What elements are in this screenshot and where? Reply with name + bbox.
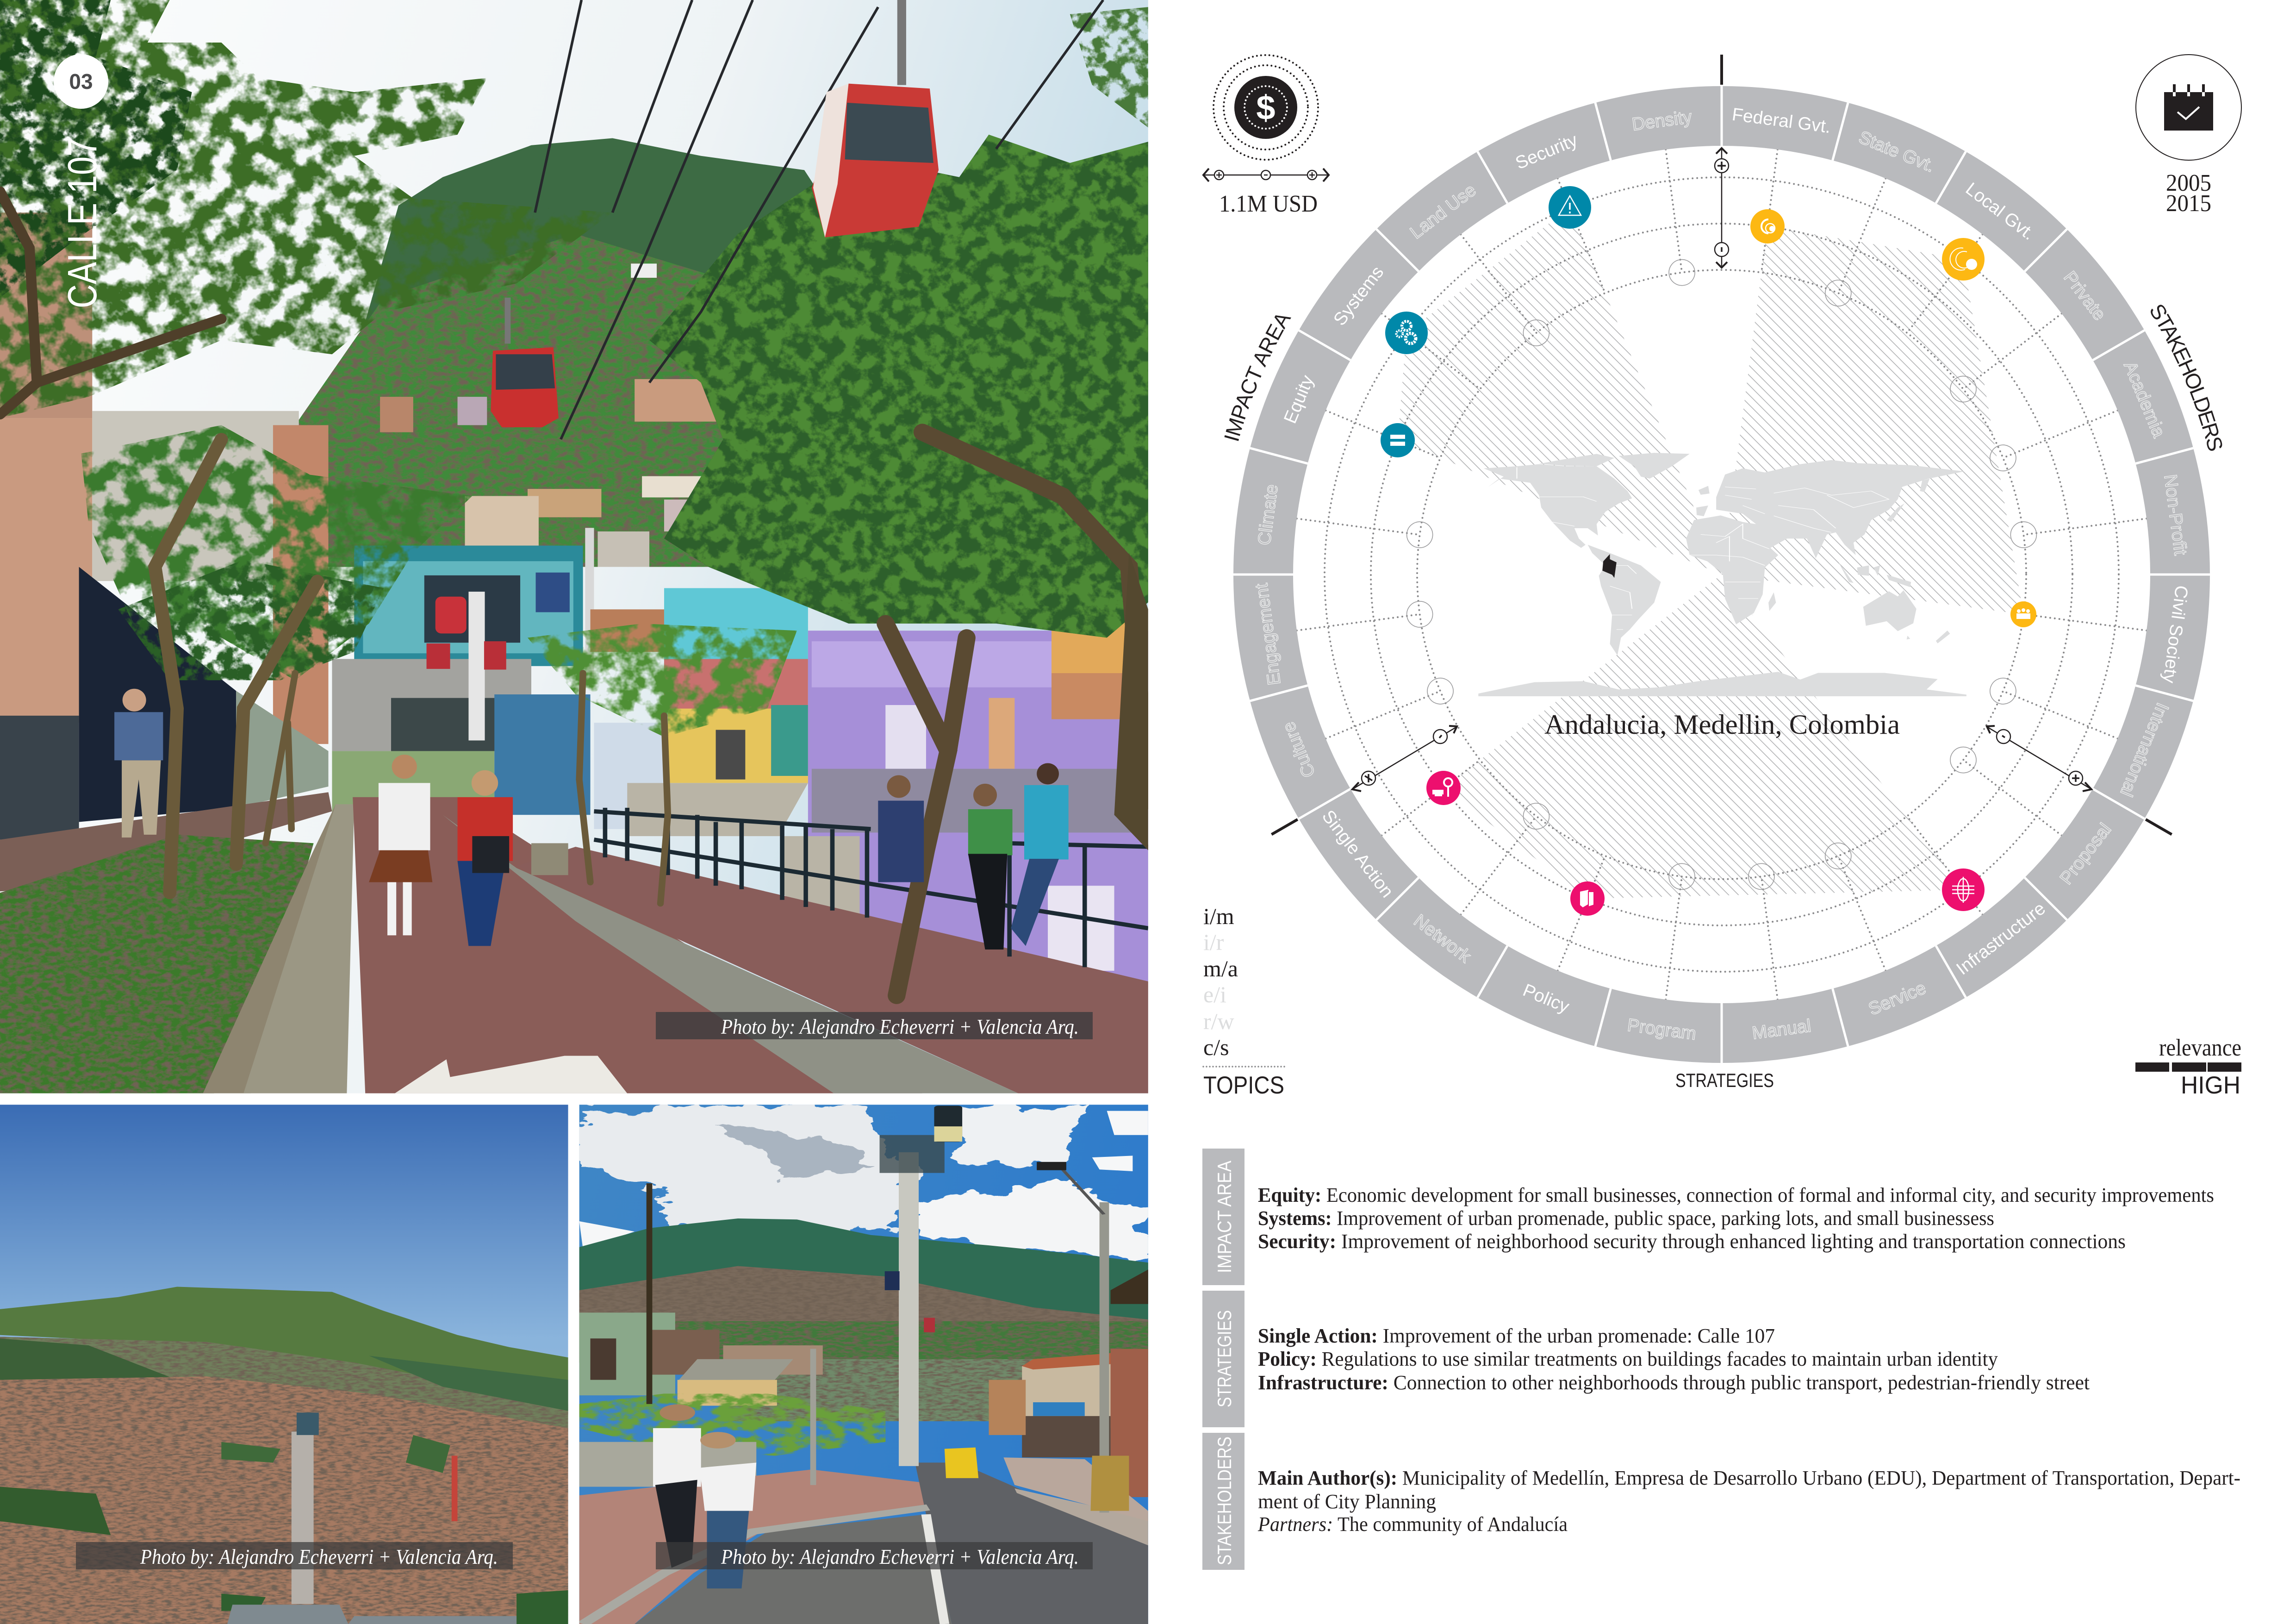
project dates [2166,170,2211,217]
ring labels: strategies: Proposal [2056,819,2116,888]
panel: impact area description [1202,1149,2214,1285]
panel: stakeholders description [1202,1433,2240,1570]
ring labels: strategies: Network [1410,911,1475,967]
sector ticks [1271,55,2172,834]
topics legend: c/s [1203,1034,1229,1060]
panel: stakeholders description: Partners: The community of Andalucía [1257,1513,1568,1536]
caption: photo credit 2: Photo by: Alejandro Echeverri + Valencia Arq. [140,1545,498,1568]
relevance scale arrow: right [1987,726,2091,791]
budget value: 1.1M USD [1219,191,1318,217]
topics legend: m/a [1203,956,1238,981]
icon: policy books [1570,881,1605,916]
panel: stakeholders description: Main Author(s): Municipality of Medellín, Empresa de Desarrollo Urbano (EDU), Department of Transportation, Depart- [1258,1467,2240,1489]
relevance scale arrow: top [1715,148,1729,268]
topics legend: e/i [1203,981,1226,1007]
panel: impact area description: Equity: Economic development for small businesses, connection of formal and informal city, and security improvements [1258,1184,2214,1206]
caption: photo credit 1: Photo by: Alejandro Echeverri + Valencia Arq. [721,1015,1079,1038]
dotted concentric grid [1297,150,2147,999]
location label: Andalucia, Medellin, Colombia [1544,709,1900,740]
ring labels: impact area: Security [1512,130,1580,174]
ring labels: impact area: Density [1631,107,1693,135]
project dates: 2005 [2166,170,2211,196]
curved label: impact area: IMPACT AREA [1219,308,1295,444]
caption: photo credit 3: Photo by: Alejandro Echeverri + Valencia Arq. [721,1545,1079,1568]
ring labels: stakeholders [1731,105,2191,800]
photo: aerial view of Medellin hillside [0,1105,568,1624]
relevance legend: relevance [2159,1035,2241,1061]
ring labels: impact area: Engagement [1251,582,1285,686]
panel: strategies description: Infrastructure: Connection to other neighborhoods through public transport, pedestrian-friendly street [1258,1371,2090,1394]
ring labels: stakeholders: Local Gvt. [1962,179,2038,244]
ring labels: stakeholders: Civil Society [2159,584,2191,685]
ring labels: strategies: Manual [1751,1016,1812,1043]
project dates: 2015 [2166,190,2211,217]
icon: budget [1213,55,1318,160]
empty topic markers [1405,258,2038,891]
topics legend [1203,903,1285,1099]
caption: photo credit 1 [656,1012,1093,1039]
topics legend: i/r [1203,929,1224,955]
hatched relevance polygons [1398,207,2023,899]
relevance scale arrow: left [1352,726,1457,791]
ring labels: strategies: Service [1866,978,1929,1019]
panel: strategies description: Single Action: Improvement of the urban promenade: Calle 107 [1258,1324,1775,1347]
label: strategies: STRATEGIES [1675,1069,1774,1091]
panel: stakeholders description: STAKEHOLDERS [1213,1437,1235,1565]
panel: impact area description: Security: Improvement of neighborhood security through enhanced lighting and transportation connections [1258,1230,2126,1253]
project number badge [54,54,108,109]
land masses [1478,453,1966,696]
budget scale arrow [1203,169,1329,181]
ring labels: strategies: Policy [1520,980,1572,1017]
photo: street with cable car pylon [579,1105,1148,1624]
caption: photo credit 3 [656,1542,1093,1569]
ring labels: impact area: Land Use [1406,180,1480,243]
grey segmented ring [1233,86,2210,1063]
panel: strategies description: Policy: Regulations to use similar treatments on buildings facades to maintain urban identity [1258,1348,1998,1370]
ring labels: stakeholders: State Gvt. [1856,127,1938,176]
icon: local government [1942,238,1985,281]
ring labels: strategies [1318,806,2116,1044]
panel: strategies description [1202,1291,2090,1427]
ring labels: impact area: Equity [1280,372,1318,426]
icon: civil society [2010,601,2036,627]
ring labels: stakeholders: Non-Profit [2160,473,2190,556]
Colombia highlight [1602,554,1617,578]
topics legend: i/m [1203,903,1234,929]
panel: strategies description: STRATEGIES [1213,1310,1235,1407]
ring labels: stakeholders: Private [2060,268,2109,324]
ring labels: strategies: Infrastructure [1953,899,2049,979]
icon: calendar [2136,55,2241,160]
photo: Calle 107 promenade and cable cars [0,0,1148,1093]
icon: security [1549,186,1591,229]
topics legend: r/w [1203,1008,1234,1034]
icon: equity [1381,423,1415,457]
curved label: stakeholders: STAKEHOLDERS [2145,300,2228,453]
icon: infrastructure [1942,868,1985,911]
panel: impact area description: Systems: Improvement of urban promenade, public space, parking lots, and small businessess [1258,1207,1994,1230]
ring labels: strategies: Single Action [1318,806,1397,901]
project title: CALLE 107 [59,138,105,308]
caption: photo credit 2 [76,1542,513,1569]
ring labels: impact area [1251,107,1693,781]
country borders [1517,467,1889,630]
ring labels: impact area: Climate [1254,483,1282,546]
relevance legend: HIGH [2181,1072,2240,1099]
arc guides [1220,110,2224,762]
icon: systems gears [1385,312,1428,354]
topics legend: TOPICS [1203,1072,1284,1099]
panel: impact area description: IMPACT AREA [1213,1161,1235,1273]
panel: stakeholders description: ment of City Planning [1258,1490,1436,1513]
ring labels: stakeholders: Academia [2120,358,2169,440]
ring labels: impact area: Systems [1330,262,1388,330]
icon: budget: $ [1256,88,1276,127]
ring labels: stakeholders: Federal Gvt. [1731,105,1832,137]
relevance legend [2135,1035,2241,1099]
ring labels: stakeholders: International [2116,700,2172,800]
icon: federal government [1750,209,1785,244]
map: world [1478,453,1966,696]
ring labels: strategies: Program [1626,1015,1698,1044]
ring labels: impact area: Culture [1279,719,1319,781]
radial diagram [1233,55,2210,1063]
icon: single action tree and bench [1426,771,1461,805]
project number badge: 03 [69,69,93,94]
